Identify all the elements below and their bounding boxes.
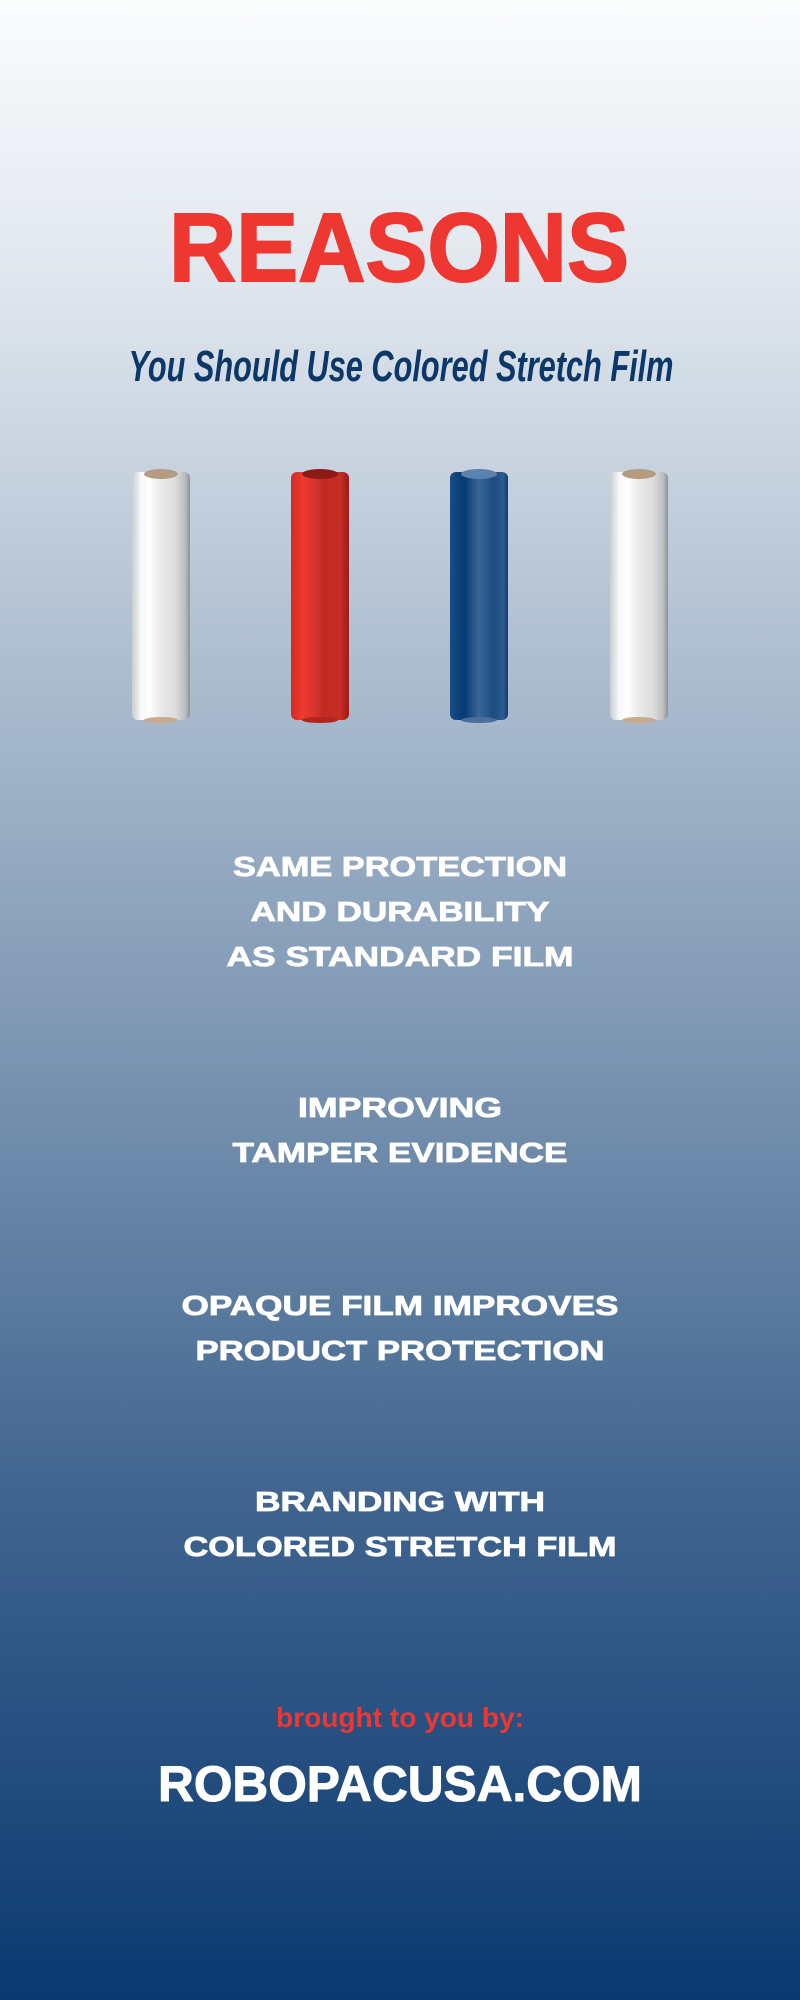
reason 3: OPAQUE FILM IMPROVES — [182, 1290, 618, 1321]
reason 3 — [182, 1290, 618, 1366]
icon: white roll — [132, 469, 190, 723]
reason 2: IMPROVING — [298, 1092, 502, 1123]
reason 3: PRODUCT PROTECTION — [196, 1335, 604, 1366]
reason 1: AS STANDARD FILM — [226, 941, 574, 972]
icon: blue roll — [450, 469, 508, 723]
website: ROBOPACUSA.COM — [158, 1756, 642, 1812]
reason 4: COLORED STRETCH FILM — [184, 1531, 616, 1562]
reason 2 — [232, 1092, 568, 1168]
reason 2: TAMPER EVIDENCE — [232, 1137, 568, 1168]
reason 4: BRANDING WITH — [255, 1486, 545, 1517]
reason 4 — [184, 1486, 616, 1562]
icon: white roll 2 — [610, 469, 668, 723]
credit label: brought to you by: — [276, 1702, 524, 1733]
reason 1: SAME PROTECTION — [233, 851, 567, 882]
title: REASONS — [169, 193, 629, 302]
reason 1: AND DURABILITY — [250, 896, 550, 927]
reason 1 — [226, 851, 574, 972]
icon: red roll — [291, 469, 349, 723]
rolls illustration — [132, 469, 668, 723]
